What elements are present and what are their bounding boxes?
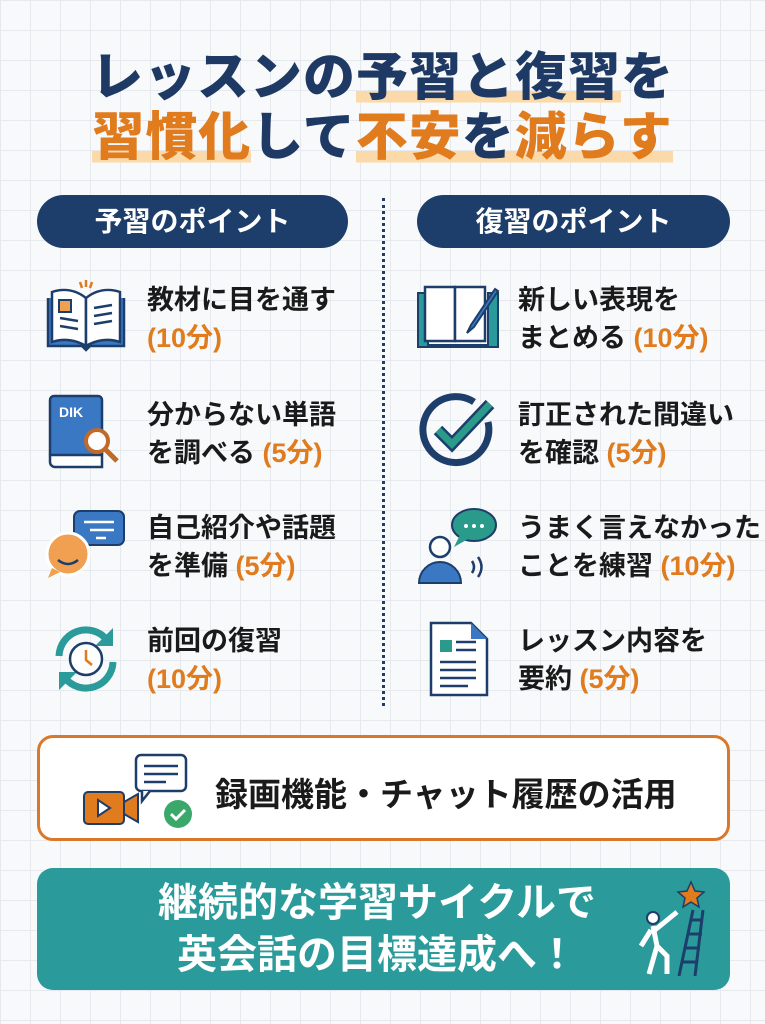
text: item 7: うまく言えなかった bbox=[518, 513, 761, 543]
icon: speaker bbox=[418, 508, 497, 584]
text: conclusion bbox=[158, 881, 596, 977]
text: item 8 bbox=[518, 626, 707, 694]
text: item 1: (10分) bbox=[147, 323, 222, 353]
panel: recording & chat bbox=[37, 735, 730, 841]
text: item 5: 新しい表現を bbox=[518, 285, 680, 315]
title: 習慣化して不安を減らす bbox=[92, 109, 673, 167]
text: item 6: 訂正された間違い bbox=[518, 400, 734, 430]
title bbox=[91, 49, 674, 167]
text: item 8: レッスン内容を bbox=[518, 626, 707, 656]
text: item 7: ことを練習 (10分) bbox=[518, 551, 736, 581]
icon: check circle bbox=[419, 393, 494, 466]
icon: cycle clock bbox=[56, 626, 116, 692]
icon: dictionary: DIK bbox=[59, 404, 83, 420]
icon: climber star bbox=[638, 880, 706, 976]
text: item 1 bbox=[147, 285, 336, 353]
text: item 2: 分からない単語 bbox=[147, 400, 336, 430]
text: item 5: まとめる (10分) bbox=[518, 323, 709, 353]
text: conclusion: 英会話の目標達成へ！ bbox=[177, 933, 577, 977]
text: item 5 bbox=[518, 285, 709, 353]
text: item 4: 前回の復習 bbox=[147, 626, 282, 656]
text: item 3: 自己紹介や話題 bbox=[147, 513, 336, 543]
text: item 7 bbox=[518, 513, 761, 581]
heading: 復習のポイント bbox=[417, 195, 730, 248]
text: item 4 bbox=[147, 626, 282, 694]
text: recording: 録画機能・チャット履歴の活用 bbox=[215, 776, 677, 813]
text: conclusion: 継続的な学習サイクルで bbox=[158, 881, 596, 925]
icon: open book bbox=[46, 280, 126, 352]
icon: document bbox=[430, 622, 488, 696]
text: item 6: を確認 (5分) bbox=[518, 438, 667, 468]
text: item 6 bbox=[518, 400, 734, 468]
icon: dictionary bbox=[48, 394, 119, 468]
text: item 8: 要約 (5分) bbox=[518, 664, 640, 694]
text: item 1: 教材に目を通す bbox=[147, 285, 336, 315]
text: item 3: を準備 (5分) bbox=[147, 551, 296, 581]
text: item 4: (10分) bbox=[147, 664, 222, 694]
icon: video chat bbox=[83, 754, 192, 828]
text: item 2: を調べる (5分) bbox=[147, 438, 323, 468]
text: item 2 bbox=[147, 400, 336, 468]
heading: 予習のポイント: 予習のポイント bbox=[94, 206, 290, 237]
icon: chat bubbles bbox=[48, 510, 125, 578]
text: item 3 bbox=[147, 513, 336, 581]
icon: notebook pen bbox=[417, 286, 500, 348]
heading: 予習のポイント bbox=[37, 195, 348, 248]
heading: 復習のポイント: 復習のポイント bbox=[475, 206, 672, 237]
title: レッスンの予習と復習を bbox=[91, 49, 674, 107]
panel: conclusion banner bbox=[37, 868, 730, 990]
